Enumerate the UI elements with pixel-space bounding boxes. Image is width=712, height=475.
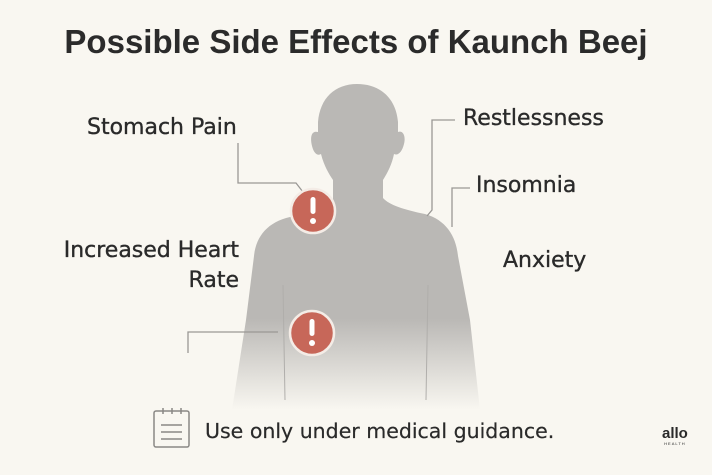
alert icon: lower <box>290 311 334 355</box>
label: restlessness: Restlessness <box>463 106 604 131</box>
label: increased heart rate: Increased Heart <box>64 238 239 263</box>
title: Possible Side Effects of Kaunch Beej <box>64 23 648 60</box>
silhouette <box>232 84 480 410</box>
label: stomach pain: Stomach Pain <box>87 115 237 140</box>
label: increased heart rate: Rate <box>189 268 239 293</box>
label: increased heart rate <box>64 238 239 293</box>
footer note: Use only under medical guidance. <box>205 419 554 443</box>
label: insomnia: Insomnia <box>476 173 576 198</box>
logo: allo <box>662 425 688 442</box>
logo: HEALTH <box>664 441 686 446</box>
alert icon: upper <box>291 189 335 233</box>
icon: notepad <box>154 408 189 447</box>
label: anxiety: Anxiety <box>503 248 586 273</box>
connector lines <box>188 120 470 353</box>
